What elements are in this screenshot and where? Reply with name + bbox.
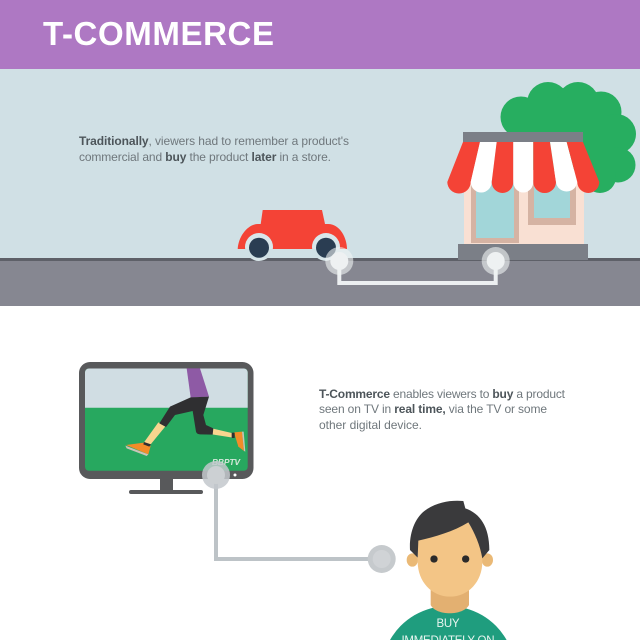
- header banner: [0, 0, 640, 69]
- icon: car: [238, 210, 347, 261]
- panel: traditional shopping scene: [0, 69, 640, 306]
- text: t-commerce description: [319, 387, 566, 432]
- icon: viewer head: [407, 501, 493, 613]
- icon: shirt: [390, 606, 507, 640]
- icon: television: [79, 362, 254, 494]
- connector: television to viewer: [202, 461, 396, 573]
- text: t-commerce description: seen on TV in real time, via the TV or some: [319, 402, 547, 416]
- text: t-commerce description: other digital device.: [319, 418, 422, 432]
- text: t-commerce description: T-Commerce enables viewers to buy a product: [319, 387, 566, 401]
- runner legs: [125, 368, 245, 456]
- panel: t-commerce scene: [79, 362, 566, 640]
- icon: shop: [447, 132, 599, 260]
- title: T-COMMERCE: [43, 15, 274, 52]
- text: shirt message: [402, 618, 494, 640]
- text: traditional purchase description: [79, 134, 349, 164]
- connector: car to shop: [325, 247, 510, 283]
- channel logo: BBPTV: [212, 457, 241, 467]
- text: shirt message: BUY: [436, 618, 460, 630]
- text: traditional purchase description: Traditionally, viewers had to remember a product's: [79, 134, 349, 148]
- awning: [447, 142, 599, 194]
- icon: tree: [500, 82, 636, 193]
- road: [0, 258, 640, 306]
- text: traditional purchase description: commercial and buy the product later in a store.: [79, 150, 331, 164]
